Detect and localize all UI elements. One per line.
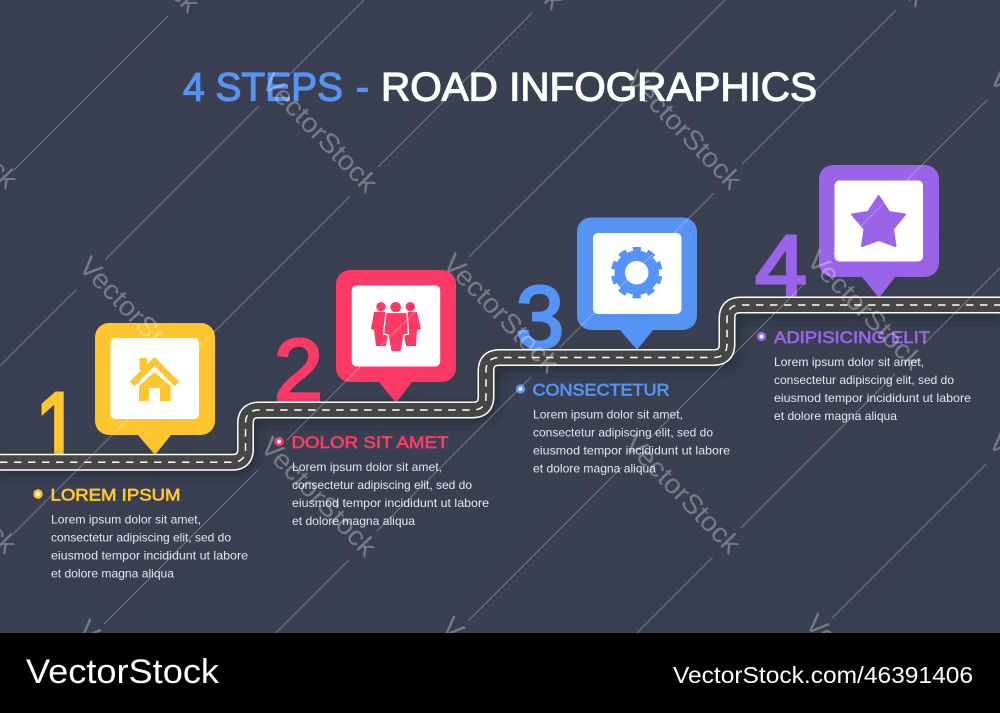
bullet 4	[757, 332, 766, 341]
number 4: 4	[755, 217, 807, 316]
watermark: VectorStock	[619, 428, 747, 560]
body 4: et dolore magna aliqua	[774, 409, 897, 423]
step 2 marker	[274, 270, 456, 420]
watermark: VectorStock	[73, 251, 201, 382]
footer bar	[0, 633, 1000, 713]
bullet 1	[33, 489, 43, 499]
title: -	[356, 66, 369, 110]
body 1	[51, 512, 248, 580]
pin 2	[336, 270, 456, 403]
footer logo: VectorStock	[26, 653, 220, 691]
road	[0, 305, 1000, 467]
pin 4 window	[834, 180, 923, 262]
body 1: Lorem ipsum dolor sit amet,	[51, 512, 201, 526]
body 2: Lorem ipsum dolor sit amet,	[292, 460, 442, 474]
heading 1: LOREM IPSUM	[50, 486, 180, 504]
body 2: eiusmod tempor incididunt ut labore	[292, 496, 489, 510]
step 4 marker	[755, 165, 939, 316]
pin 4	[819, 165, 939, 298]
number 3: 3	[516, 268, 564, 366]
number 1: 1	[35, 371, 80, 486]
icon: gear	[613, 249, 660, 296]
icon: people	[371, 302, 421, 352]
watermark: Ve	[72, 614, 115, 658]
watermark: Ve	[800, 608, 843, 652]
icon: star	[852, 196, 905, 246]
watermark: VectorStock	[801, 245, 929, 376]
bullet 3	[516, 384, 525, 394]
pin 2 window	[352, 286, 440, 366]
body 4: Lorem ipsum dolor sit amet,	[774, 355, 924, 369]
pin 1 window	[110, 338, 199, 419]
step 3 text	[516, 380, 730, 475]
body 1: consectetur adipiscing elit, sed do	[51, 530, 231, 544]
step 1 marker	[35, 323, 215, 486]
body 3	[533, 407, 730, 475]
watermark: VectorStock	[255, 431, 383, 563]
body 4	[774, 355, 971, 423]
heading 3: CONSECTETUR	[532, 380, 670, 400]
heading 4: ADIPISICING ELIT	[774, 328, 930, 347]
body 1: eiusmod tempor incididunt ut labore	[51, 548, 248, 562]
title: 4 STEPS	[183, 66, 343, 110]
title	[183, 66, 817, 110]
watermark: VectorStock	[256, 67, 384, 199]
body 2: et dolore magna aliqua	[292, 514, 415, 528]
title: ROAD INFOGRAPHICS	[381, 66, 817, 110]
step 1 text	[33, 486, 248, 580]
icon: house	[132, 358, 177, 401]
body 4: consectetur adipiscing elit, sed do	[774, 373, 954, 387]
watermark: Ve	[436, 611, 479, 655]
watermark: VectorStock	[620, 64, 748, 196]
body 2: consectetur adipiscing elit, sed do	[292, 478, 472, 492]
watermark: VectorStock	[437, 248, 565, 379]
step 4 text	[757, 328, 971, 423]
number 2: 2	[274, 320, 323, 420]
bullet 2	[274, 437, 284, 446]
body 3: Lorem ipsum dolor sit amet,	[533, 407, 683, 421]
step 2 text	[274, 433, 489, 528]
body 3: et dolore magna aliqua	[533, 461, 656, 475]
pin 3	[577, 218, 697, 350]
step 3 marker	[516, 218, 697, 366]
body 1: et dolore magna aliqua	[51, 566, 174, 580]
pin 1	[95, 323, 215, 455]
body 4: eiusmod tempor incididunt ut labore	[774, 391, 971, 405]
heading 2: DOLOR SIT AMET	[292, 433, 448, 452]
body 3: consectetur adipiscing elit, sed do	[533, 425, 713, 439]
pin 3 window	[593, 233, 682, 314]
body 3: eiusmod tempor incididunt ut labore	[533, 443, 730, 457]
footer id: VectorStock.com/46391406	[673, 662, 973, 688]
body 2	[292, 460, 489, 528]
